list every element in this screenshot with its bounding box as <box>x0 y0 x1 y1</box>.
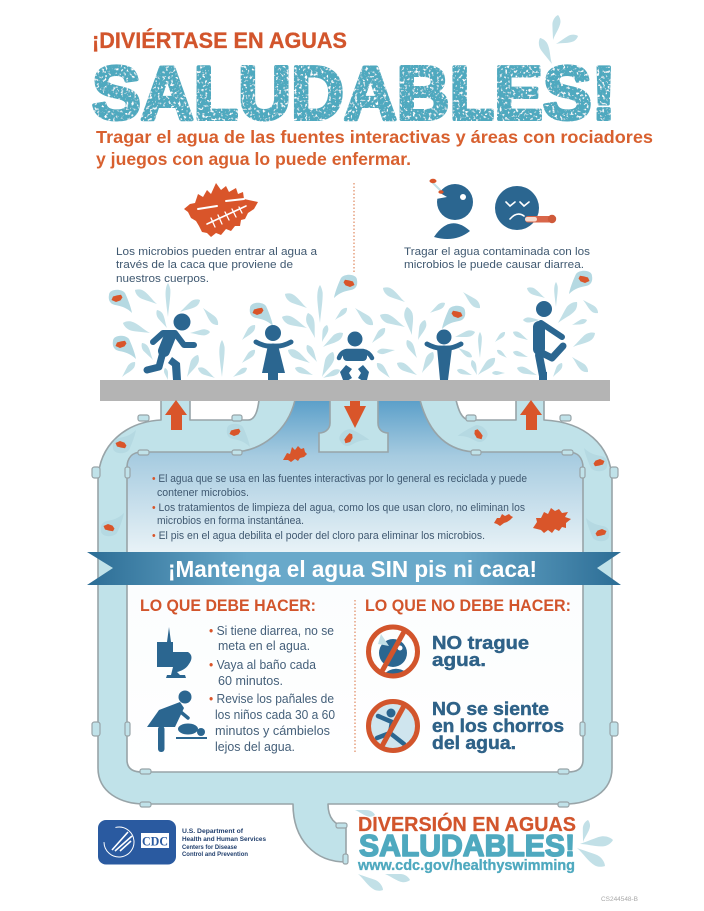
icon: no swallowing <box>368 627 418 677</box>
publication code: CS244548-B <box>601 896 638 903</box>
germ: left <box>283 446 307 462</box>
text: swallowing causes diarrhea: microbios le puede causar diarrea. <box>404 259 584 271</box>
germ: large right <box>533 508 571 533</box>
subtitle: Tragar el agua de las fuentes interactivas y áreas con rociadores <box>96 127 653 147</box>
figure: baby <box>339 332 372 381</box>
text: swallowing causes diarrhea: Tragar el agua contaminada con los <box>404 246 591 258</box>
text: do list one: • Si tiene diarrea, no se <box>209 624 334 638</box>
pipe flanges <box>92 415 618 864</box>
icon: footer splash <box>354 807 614 894</box>
text: germs enter water: través de la caca que proviene de <box>116 259 293 271</box>
footer heading: DIVERSIÓN EN AGUAS <box>358 812 576 836</box>
germ: small right <box>494 514 513 526</box>
text: germs enter water: nuestros cuerpos. <box>116 273 209 285</box>
text: water facts: • El agua que se usa en las fuentes interactivas por lo general es reciclada y puede <box>152 473 527 485</box>
text: agency name <box>182 828 267 858</box>
text: no sitting on jets: NO se siente <box>432 698 549 719</box>
figure: boy <box>427 330 461 380</box>
title: diviertase en aguas: ¡DIVIÉRTASE EN AGUAS <box>92 28 347 53</box>
logo: cdc <box>98 820 176 864</box>
divider: bottom dotted line <box>354 600 356 752</box>
banner: ¡Mantenga el agua SIN pis ni caca! <box>168 556 537 582</box>
text: agency name: Centers for Disease <box>182 844 238 851</box>
text: no sitting on jets <box>432 698 564 753</box>
logo: cdc: CDC <box>142 834 168 848</box>
figure: girl <box>256 325 291 380</box>
text: do list two: minutos y cámbielos <box>215 724 330 738</box>
footer url: www.cdc.gov/healthyswimming <box>357 857 575 874</box>
text: no swallowing: NO trague <box>432 632 529 653</box>
text: water facts: • Los tratamientos de limpieza del agua, como los que usan cloro, no eliminan los <box>152 502 525 514</box>
text: water facts: • El pis en el agua debilita el poder del cloro para eliminar los microbios. <box>152 530 485 542</box>
icon: no sitting on jets <box>368 702 418 750</box>
text: no sitting on jets: en los chorros <box>432 715 564 736</box>
text: no swallowing: agua. <box>432 649 486 670</box>
text: do list two: lejos del agua. <box>215 740 295 754</box>
inner water area <box>127 400 583 772</box>
arrow: up right <box>520 400 542 430</box>
figure: running child <box>147 314 194 380</box>
text: agency name: Health and Human Services <box>182 836 267 843</box>
icon: sick face with thermometer <box>495 186 556 230</box>
figure: stretching person <box>536 301 563 380</box>
subtitle <box>96 127 653 169</box>
text: water facts: contener microbios. <box>157 487 249 499</box>
text: do list two: • Revise los pañales de <box>209 692 334 706</box>
center down pipe <box>319 400 388 452</box>
germ drops in pipes <box>101 418 609 541</box>
text: do list two <box>209 692 335 754</box>
icon: germ in stool <box>184 183 258 237</box>
arrow: up left <box>165 400 187 430</box>
text: agency name: U.S. Department of <box>182 828 244 835</box>
banner <box>87 552 621 585</box>
text: no swallowing <box>432 632 529 670</box>
platform bar <box>100 380 610 401</box>
icon: title water splash <box>536 14 579 66</box>
germ drops in the jets <box>109 271 592 359</box>
pipe system <box>92 400 618 864</box>
water jets <box>120 282 600 381</box>
text: germs enter water <box>116 246 318 285</box>
arrow: down center <box>344 401 366 428</box>
footer saludables: SALUDABLES! <box>359 828 575 863</box>
text: water facts <box>152 473 527 542</box>
icon: child swallowing water <box>430 179 473 239</box>
title: saludables: SALUDABLES! <box>92 51 616 135</box>
text: do list one: meta en el agua. <box>218 639 310 653</box>
heading: do: LO QUE DEBE HACER: <box>140 596 316 615</box>
text: no sitting on jets: del agua. <box>432 732 516 753</box>
text: swallowing causes diarrhea <box>404 246 591 271</box>
divider: top dotted line <box>353 183 355 272</box>
text: water facts: microbios en forma instantánea. <box>157 515 304 527</box>
text: do list one: 60 minutos. <box>218 674 283 688</box>
icon: toilet <box>157 627 192 678</box>
text: agency name: Control and Prevention <box>182 851 248 858</box>
heading: do not: LO QUE NO DEBE HACER: <box>365 596 571 615</box>
text: germs enter water: Los microbios pueden entrar al agua a <box>116 246 318 258</box>
text: do list one <box>209 624 334 688</box>
icon: parent changing diaper <box>147 690 207 752</box>
subtitle: y juegos con agua lo puede enfermar. <box>96 149 411 169</box>
text: do list two: los niños cada 30 a 60 <box>215 708 335 722</box>
text: do list one: • Vaya al baño cada <box>209 658 316 672</box>
